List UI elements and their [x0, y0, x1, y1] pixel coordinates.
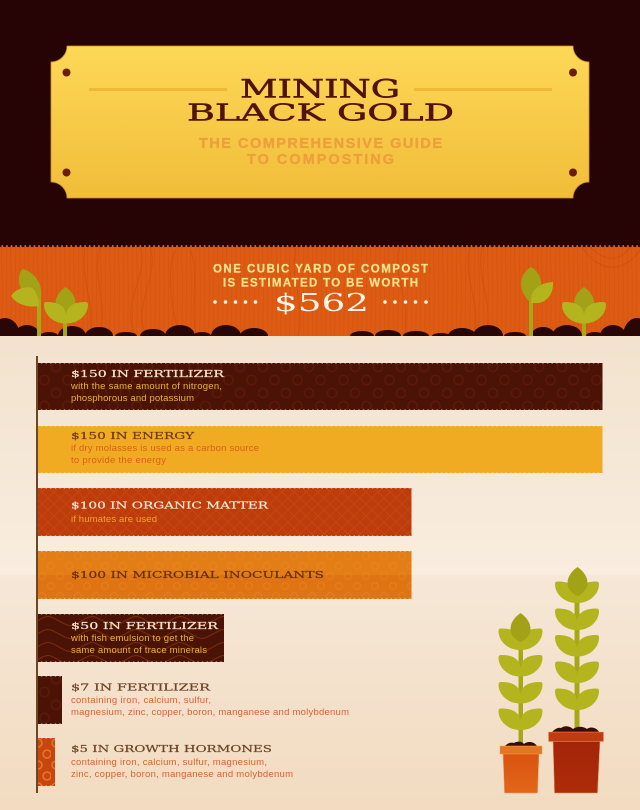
bar: $50 fertilizer: with fish emulsion to get the	[70, 633, 194, 644]
bar: $5 growth hormones: containing iron, calcium, sulfur, magnesium,	[71, 757, 267, 768]
small plant leaves	[498, 613, 542, 730]
plaque	[51, 46, 589, 198]
band heading: IS ESTIMATED TO BE WORTH	[223, 278, 418, 290]
plaque screws	[62, 68, 577, 176]
bar: $150 energy: if dry molasses is used as a carbon source	[71, 443, 259, 454]
title: MINING	[240, 74, 400, 104]
bar: $100 organic matter: if humates are used	[71, 514, 157, 525]
bar: $150 energy: $150 IN ENERGY	[71, 431, 195, 442]
bar: $150 fertilizer: phosphorous and potassium	[71, 393, 194, 404]
small pot	[500, 746, 542, 793]
large pot soil	[552, 726, 599, 732]
subtitle: THE COMPREHENSIVE GUIDE	[199, 136, 442, 152]
bar: $100 microbial inoculants	[37, 550, 412, 600]
chart axis	[36, 356, 38, 793]
title: BLACK GOLD	[187, 98, 454, 126]
large plant stem	[574, 590, 580, 730]
bar: $100 organic matter: $100 IN ORGANIC MATTER	[71, 500, 269, 512]
plaque shape	[51, 46, 589, 198]
large pot	[548, 732, 604, 793]
seedling right 2	[562, 287, 606, 336]
bar: $150 energy: to provide the energy	[71, 455, 166, 466]
soil mounds	[0, 318, 640, 354]
bar: $50 fertilizer: same amount of trace minerals	[71, 645, 207, 656]
dotted ornaments	[213, 300, 428, 304]
title rules	[89, 88, 552, 91]
subtitle: TO COMPOSTING	[247, 152, 394, 168]
bar: $150 fertilizer: with the same amount of nitrogen,	[70, 381, 222, 392]
bar: $7 fertilizer: $7 IN FERTILIZER	[71, 682, 211, 694]
bar: $100 organic matter	[37, 488, 412, 536]
subtitle	[199, 136, 442, 168]
bar: $7 fertilizer	[37, 676, 349, 724]
bar: $150 fertilizer: $150 IN FERTILIZER	[71, 369, 225, 380]
band heading	[213, 264, 428, 290]
seedling right 1	[521, 267, 553, 336]
bar: $5 growth hormones: zinc, copper, boron, manganese and molybdenum	[71, 769, 293, 780]
bar: $150 fertilizer	[37, 362, 602, 410]
bar: $50 fertilizer	[37, 614, 224, 662]
scalloped band top	[0, 244, 640, 247]
large plant leaves	[555, 567, 599, 710]
band text	[213, 264, 428, 317]
band value: $562	[274, 289, 369, 317]
dark header background	[0, 0, 640, 246]
bar: $7 fertilizer: containing iron, calcium, sulfur,	[71, 695, 211, 706]
small plant stem	[518, 640, 523, 745]
title	[187, 74, 454, 126]
seedling left 2	[44, 287, 88, 336]
lower background	[0, 336, 640, 810]
bar chart	[36, 356, 602, 793]
bar: $100 microbial inoculants: $100 IN MICROBIAL INOCULANTS	[71, 570, 324, 581]
potted plant small	[498, 613, 542, 793]
potted plant large	[548, 567, 604, 793]
bar: $5 growth hormones: $5 IN GROWTH HORMONES	[71, 744, 272, 755]
bar: $7 fertilizer: magnesium, zinc, copper, boron, manganese and molybdenum	[71, 707, 349, 718]
small pot soil	[505, 742, 537, 746]
seedling left 1	[11, 269, 41, 336]
band heading: ONE CUBIC YARD OF COMPOST	[213, 264, 428, 276]
bar: $150 energy	[37, 426, 602, 474]
orange wood band	[0, 245, 640, 336]
bar: $50 fertilizer: $50 IN FERTILIZER	[71, 621, 219, 632]
bar: $5 growth hormones	[37, 738, 293, 786]
